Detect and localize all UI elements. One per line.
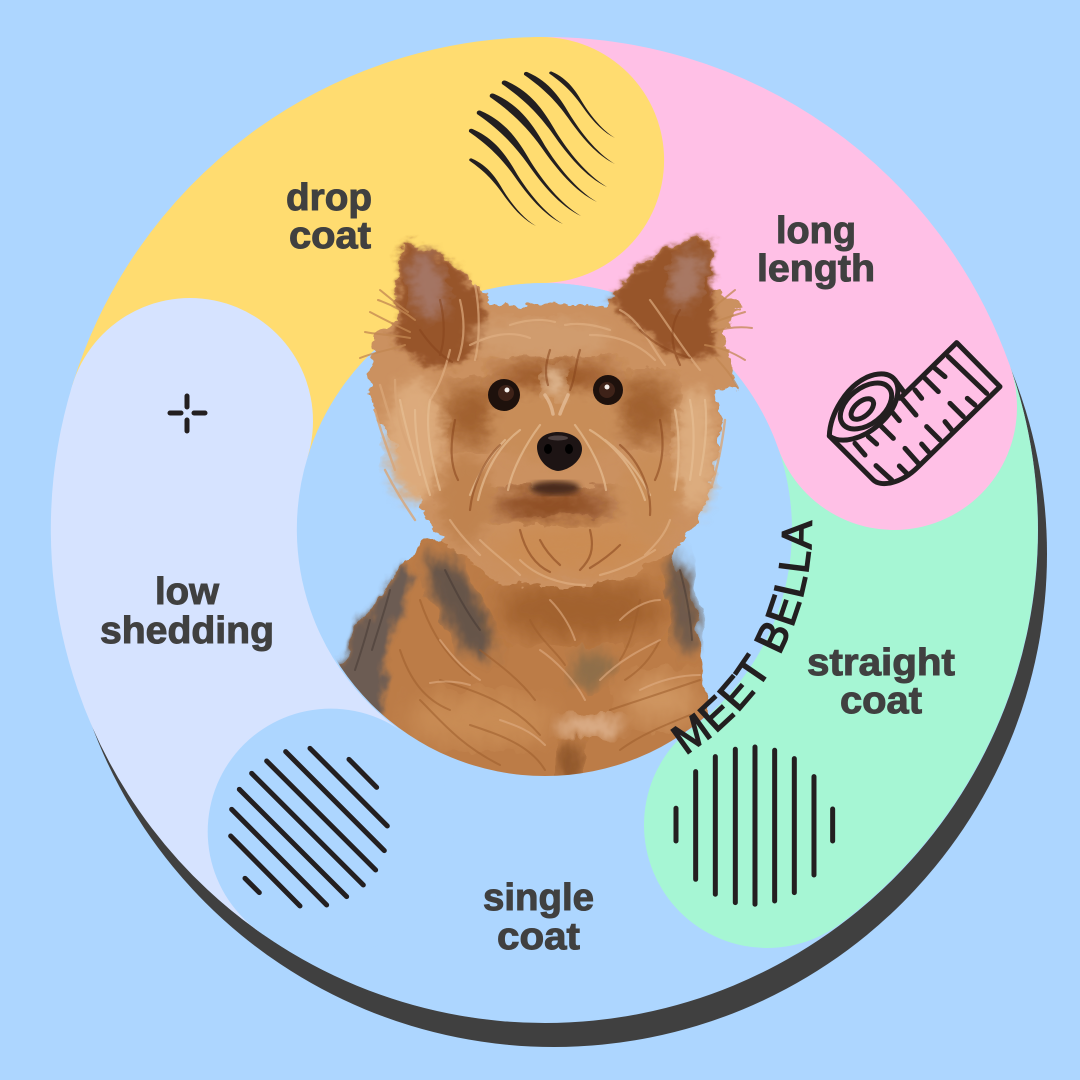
label: straight coat: straight [807,642,955,684]
centre circle [298,283,792,777]
label: low shedding: shedding [100,610,274,652]
label: low shedding [100,571,274,652]
label: drop coat: drop [286,177,372,219]
label: long length: length [757,248,875,290]
panel: single coat band [208,709,767,955]
panel: straight coat band [644,407,915,948]
label: single coat: coat [497,916,580,958]
dog right eye [593,375,623,405]
label: straight coat: coat [840,680,922,722]
panel: drop coat band [190,160,541,421]
panel: drop coat end cap [418,37,664,283]
label: drop coat [286,177,372,257]
icon: diagonal single coat lines [231,748,387,906]
label: straight coat [807,642,955,722]
label: single coat: single [483,877,594,919]
icon: crosshair sparkle [170,396,205,431]
dog left eye [488,379,520,411]
label: single coat [483,877,594,958]
panel: long length band [541,160,1017,530]
dog ears and head [360,236,752,586]
icon: wavy drop coat lines [469,71,615,226]
icon: straight coat vertical lines [676,747,833,904]
dog body [338,540,710,800]
label: long length [757,210,875,290]
dog nose [537,432,582,471]
label: long length: long [776,210,856,252]
label: drop coat: coat [289,215,371,257]
dog fur strands [360,285,752,585]
label: low shedding: low [155,571,219,613]
panel: low shedding band [67,298,331,832]
icon: tape measure [829,343,1000,484]
dog mouth [530,481,580,495]
curved title: meet bella: MEET BELLA [670,520,812,754]
